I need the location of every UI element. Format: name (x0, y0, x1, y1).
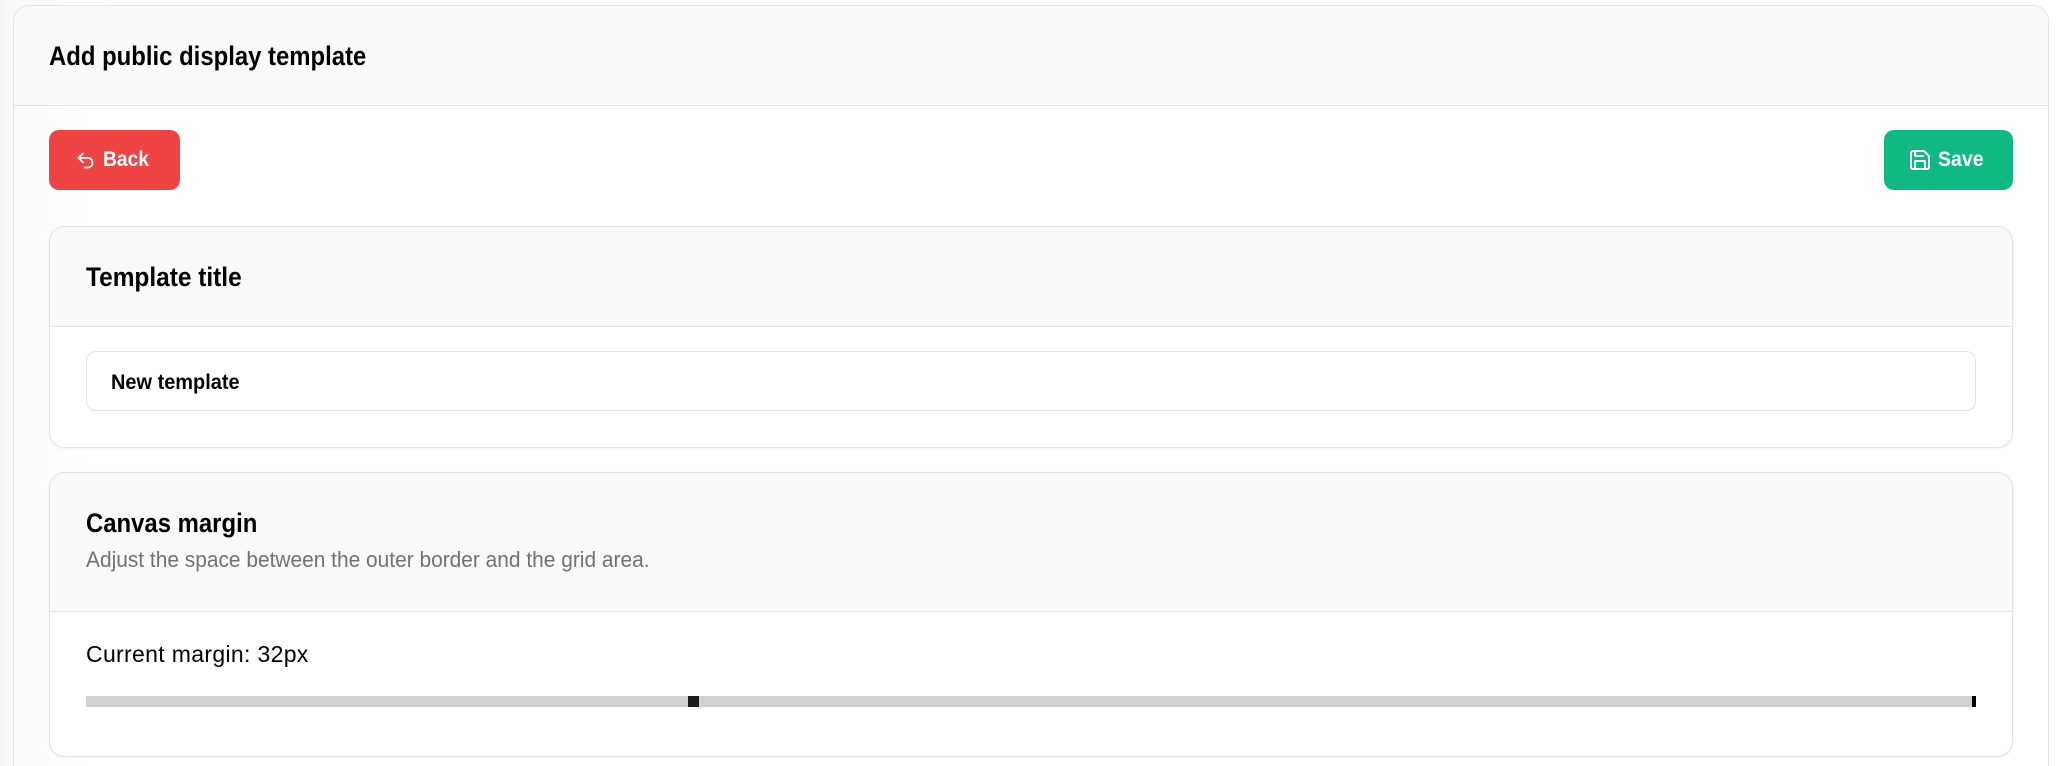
canvas margin description: Adjust the space between the outer border and the grid area. (86, 547, 650, 572)
page title: Add public display template (49, 41, 366, 71)
page header bar (14, 6, 2048, 106)
canvas margin heading: Canvas margin (86, 508, 257, 538)
template title header (50, 227, 2012, 327)
save button (1884, 130, 2013, 190)
back button (49, 130, 180, 190)
back label: Back (103, 148, 149, 171)
icon: floppy disk (1910, 150, 1930, 170)
panel: canvas margin (49, 472, 2013, 757)
template title heading: Template title (86, 262, 242, 292)
slider end marker (1972, 696, 1976, 707)
canvas margin header (50, 473, 2012, 612)
slider thumb (688, 696, 699, 707)
current margin label: Current margin: 32px (86, 641, 309, 667)
icon: back arrow (78, 152, 94, 168)
panel: template title (49, 226, 2013, 448)
input value: New template (111, 371, 240, 394)
save label: Save (1938, 148, 1984, 171)
template title input (86, 351, 1976, 411)
margin slider (86, 696, 1976, 707)
